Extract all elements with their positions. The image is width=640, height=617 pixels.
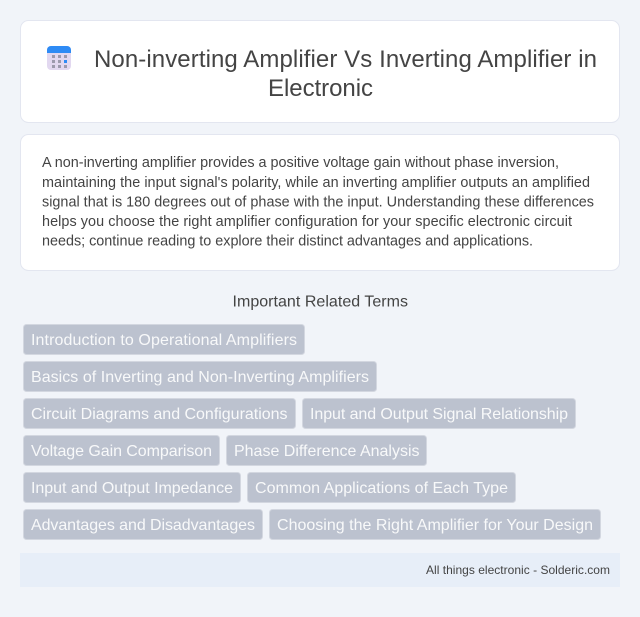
icon: calendar grid: [47, 46, 71, 70]
tag: basics: [24, 362, 376, 392]
tag: advantages: Advantages and Disadvantages: [31, 517, 255, 534]
tag: signal relationship: Input and Output Signal Relationship: [310, 406, 568, 423]
tag: circuit diagrams: Circuit Diagrams and Configurations: [31, 406, 288, 423]
footer: [20, 553, 620, 587]
panel: title header: [20, 20, 620, 122]
tag: impedance: [24, 472, 240, 502]
tag: common applications: [248, 472, 516, 502]
tag: introduction: Introduction to Operational Amplifiers: [31, 332, 297, 349]
tag: voltage gain: [24, 436, 220, 466]
tag: circuit diagrams: [24, 398, 296, 428]
tag: impedance: Input and Output Impedance: [31, 480, 233, 497]
heading: important related terms: Important Related Terms: [232, 294, 408, 310]
title: Electronic: [268, 75, 373, 102]
tag: advantages: [24, 510, 262, 540]
tag: introduction: [24, 324, 304, 354]
text block: description paragraph: helps you choose the right amplifier configuration for your specific electronic circuit: [42, 214, 572, 230]
tag: phase difference: Phase Difference Analysis: [234, 443, 420, 460]
tag: voltage gain: Voltage Gain Comparison: [31, 443, 212, 460]
footer: All things electronic - Solderic.com: [426, 563, 610, 577]
panel: description: [20, 134, 620, 270]
panel: related term tags: [24, 324, 600, 540]
text block: description paragraph: needs; continue reading to explore their distinct advantages and applications.: [42, 234, 533, 250]
tag: common applications: Common Applications of Each Type: [255, 480, 508, 497]
tag: choosing amplifier: [270, 510, 600, 540]
tag: choosing amplifier: Choosing the Right Amplifier for Your Design: [277, 517, 593, 534]
title: [94, 46, 597, 102]
tag: basics: Basics of Inverting and Non-Inverting Amplifiers: [31, 369, 369, 386]
text block: description paragraph: A non-inverting amplifier provides a positive voltage gain without phase inversion,: [42, 155, 559, 171]
text block: description paragraph: [42, 155, 594, 250]
tag: signal relationship: [302, 398, 576, 428]
tag: phase difference: [226, 436, 426, 466]
text block: description paragraph: signal that is 180 degrees out of phase with the input. Understanding these differences: [42, 194, 594, 210]
text block: description paragraph: maintaining the input signal's polarity, while an inverting amplifier outputs an amplified: [42, 175, 590, 191]
title: Non-inverting Amplifier Vs Inverting Amplifier in: [94, 46, 597, 73]
